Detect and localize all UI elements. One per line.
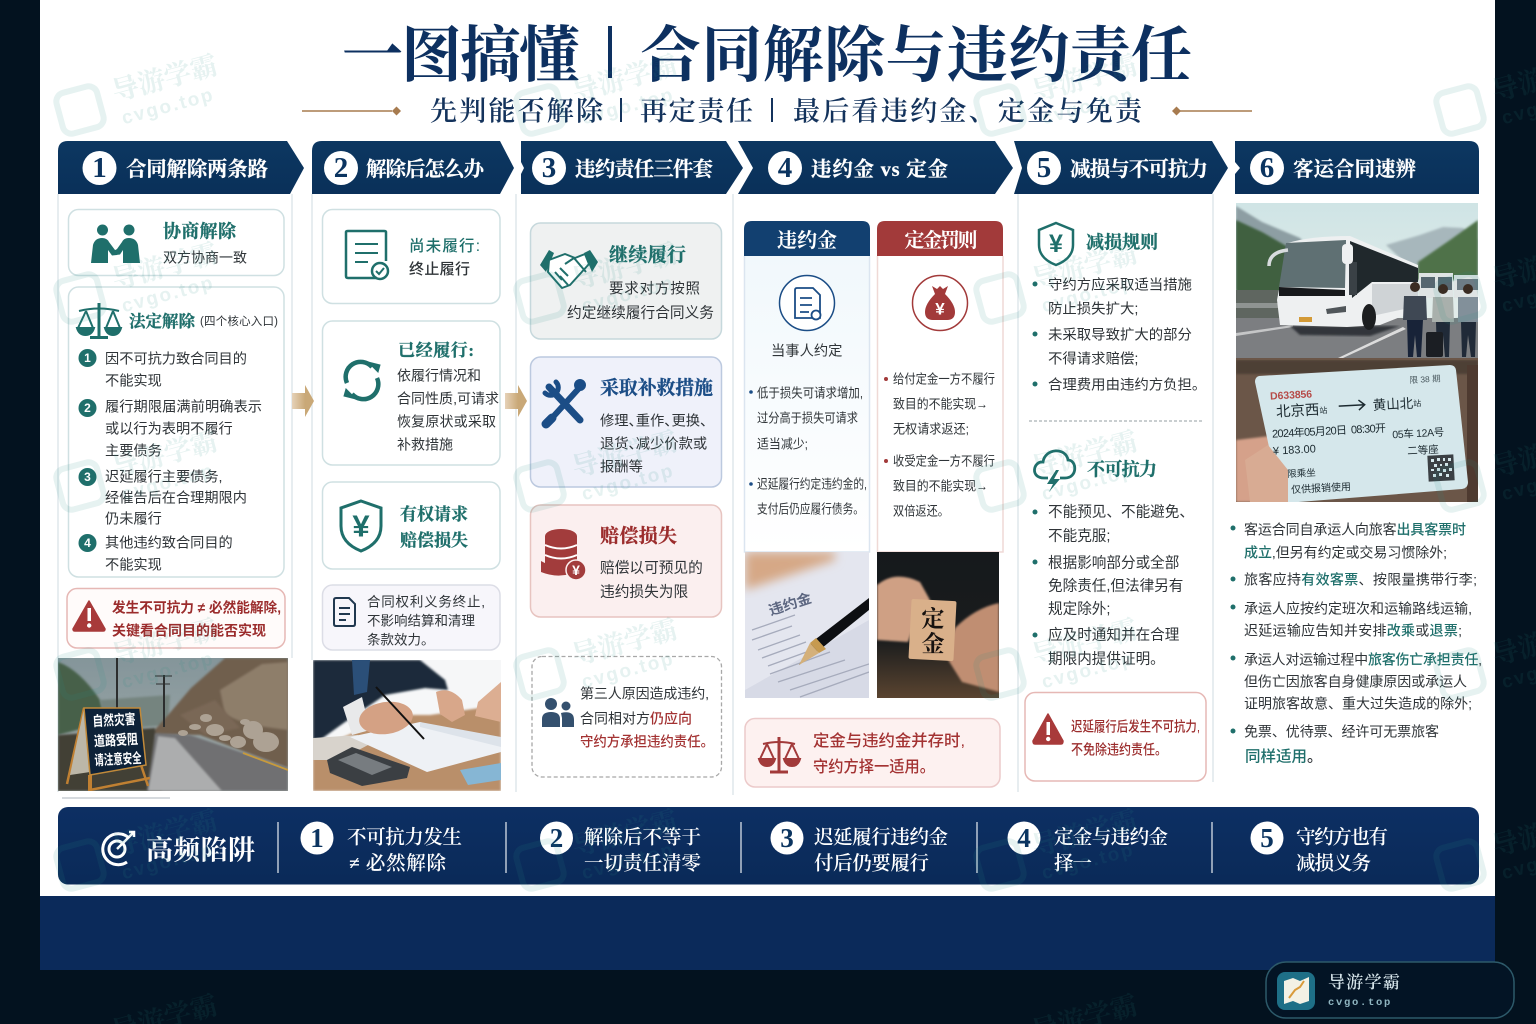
panel 2: 解除后怎么办 [312,141,514,791]
image: 车票: 黄山北站 [1372,395,1422,413]
card: 法定解除 [68,287,284,577]
watermark layer: 导游学霸 [1029,238,1141,295]
block: 减损规则: 防止损失扩大; [1048,300,1138,317]
trap 1: 1 [310,823,324,853]
watermark layer: 导游学霸 [109,614,221,671]
list: 客运规则: 免票、优待票、经许可无票旅客 [1244,723,1439,739]
watermark layer: 导游学霸 [109,50,221,107]
image: 定金木块 [877,552,999,698]
list: 客运规则: 迟延运输应告知并安排改乘或退票; [1244,622,1462,638]
icon: shield yen [1039,223,1073,265]
icon: document check [346,231,388,279]
list: 客运规则: 但伤亡因旅客自身健康原因或承运人 [1244,673,1467,689]
header 4 [738,141,1013,194]
header 1: 合同解除两条路 [126,158,268,181]
icon: warning [73,601,105,631]
trap 2: 2 [550,823,563,853]
watermark layer: 导游学霸 [109,238,221,295]
watermark layer: cvgo.top [119,648,217,693]
list: 四个入口: 仍未履行 [105,511,162,527]
list: 四个入口: 4 [84,536,91,550]
list: 四个入口: 迟延履行主要债务, [105,469,222,485]
icon: money bag: ¥ [935,300,945,318]
block: 不可抗力 [1032,451,1194,667]
trap 1: ≠ 必然解除 [349,852,447,874]
note: 择一适用: 定金与违约金并存时, [813,731,965,750]
card: 赔偿损失: 赔偿以可预见的 [600,559,703,576]
icon: handshake people [91,224,140,263]
header 4: 4 [778,152,792,184]
list: 客运规则: 同样适用。 [1245,747,1323,765]
trap 3: 付后仍要履行 [814,852,929,874]
card: 有权请求赔偿损失: 赔偿损失 [400,530,468,550]
card: 权利义务终止: 合同权利义务终止, [367,594,485,610]
block: 不可抗力: 应及时通知并在合理 [1048,625,1180,643]
watermark layer: cvgo.top [579,84,677,129]
icon: tools [545,380,584,424]
card: 已经履行: 恢复原状或采取 [397,413,496,429]
card: 赔偿损失: 违约损失为限 [600,583,688,600]
card: 继续履行: 约定继续履行合同义务 [567,304,714,321]
icon: handshake [540,250,598,288]
header 5: 减损与不可抗力 [1070,158,1208,181]
title: 一图搞懂 [342,22,580,90]
header 5 [1014,141,1228,194]
card: 尚未履行: 终止履行 [409,261,470,278]
icon: shield yen: ¥ [1049,230,1063,258]
column: 定金罚则: 致目的不能实现→ [893,479,988,494]
callout: 迟延不免责 [1025,692,1206,781]
list: 客运规则: 承运人应按约定班次和运输路线运输, [1244,600,1472,616]
list: 四个入口: 3 [84,470,91,484]
list: 四个入口: 因不可抗力致合同目的 [105,351,247,367]
image: 滑坡路段: 自然灾害 [92,711,136,729]
card: 赔偿损失 [530,505,722,617]
watermark layer: cvgo.top [1039,648,1137,693]
watermark layer: cvgo.top [579,272,677,317]
header 1: 1 [92,152,107,184]
list: 四个入口: 履行期限届满前明确表示 [105,398,262,415]
list: 四个入口: 主要债务 [105,443,162,459]
callout: 不可抗力提醒: 发生不可抗力 ≠ 必然能解除, [112,599,281,615]
image: 车票: 二等座 [1407,443,1439,457]
list: 四个入口: 1 [84,351,91,365]
icon: sync arrows [344,362,380,399]
trap 2 [540,822,701,874]
block: 不可抗力: 不能克服; [1048,527,1110,544]
column frames [58,194,1213,795]
card: 采取补救措施: 退货、减少价款或 [600,435,707,452]
list: 四个入口 [78,349,262,573]
image: 定金木块: 定 [922,607,944,632]
header 3: 3 [542,152,556,184]
block: 减损规则: 减损规则 [1086,233,1158,253]
trap 2: 解除后不等于 [584,826,701,848]
image: 滑坡路段 [58,658,288,791]
block: 不可抗力: 根据影响部分或全部 [1048,553,1179,571]
icon: target [103,832,134,865]
tab: 定金罚则 [877,221,1003,256]
list: 四个入口: 不能实现 [105,557,162,573]
note: 择一适用 [745,718,1000,787]
image: 客车与乘客 [1236,203,1478,360]
card: 法定解除: (四个核心入口) [200,314,278,328]
arrow: 1 to 2 [292,385,314,417]
column: 违约金: 迟延履行约定违约金的, [757,477,867,492]
trap 4: 定金与违约金 [1054,826,1168,848]
block: 减损规则 [1032,223,1206,393]
list: 客运规则: 旅客应持有效客票、按限量携带行李; [1244,571,1477,587]
block: 不可抗力: 不可抗力 [1087,459,1157,480]
column: 定金罚则: 无权请求返还; [893,422,969,437]
panel 3: 违约责任三件套 [521,141,743,777]
card: 第三人原因: 合同相对方仍应向 [580,710,692,726]
icon: agreement doc [780,276,834,330]
trap 2: 一切责任清零 [584,852,701,874]
card: 法定解除: 法定解除 [129,312,196,331]
watermark layer: 导游学霸 [1029,614,1141,671]
trap 4 [1008,822,1168,874]
header 6: 客运合同速辨 [1293,157,1416,181]
column: 定金罚则: 收受定金一方不履行 [893,454,995,469]
column: 定金罚则: 双倍返还。 [893,504,949,519]
icon: shield yen [341,501,381,551]
card: 协商解除 [68,210,284,276]
watermark layer: cvgo.top [119,839,217,884]
block: 减损规则: 守约方应采取适当措施 [1048,275,1192,293]
watermark layer: cvgo.top [579,839,677,884]
subtitle: 最后看违约金、定金与免责 [793,96,1145,126]
column: 违约金: 过分高于损失可请求 [757,411,858,426]
watermark layer: 导游学霸 [569,238,681,295]
watermark layer: 导游学霸 [569,614,681,671]
image: 滑坡路段: 道路受阻 [94,731,138,749]
card: 权利义务终止: 不影响结算和清理 [367,614,475,629]
tab: 违约金 [744,221,870,256]
image: 车票: 限 38 期 [1409,373,1441,385]
header 2 [312,141,514,194]
card: 第三人原因 [532,656,722,777]
header 6: 6 [1260,152,1274,184]
watermark layer: 导游学霸 [109,805,221,862]
image: 车票: D633856 [1270,388,1313,403]
watermark layer: 导游学霸 [569,805,681,862]
panel 6: 客运合同速辨 [1230,141,1482,765]
trap 1: 不可抗力发生 [347,826,462,848]
image: 滑坡路段: 请注意安全 [94,750,142,768]
watermark layer: cvgo.top [579,648,677,693]
card: 已经履行: 补救措施 [397,436,453,452]
panel 4: 违约金 vs 定金 [738,141,1013,787]
watermark layer: cvgo.top [579,460,677,505]
card: 采取补救措施: 采取补救措施 [600,377,713,399]
watermark layer: cvgo.top [1039,839,1137,884]
icon: map logo [1277,972,1315,1010]
column: 违约金: 支付后仍应履行债务。 [757,502,864,517]
watermark layer: 导游学霸 [1029,426,1141,483]
trap 5: 减损义务 [1296,852,1371,874]
arrow: 2 to 3 [505,385,527,417]
title: 合同解除与违约责任 [640,23,1192,90]
column: 违约金: 当事人约定 [771,342,842,359]
card: 继续履行: 继续履行 [609,244,686,266]
column: 定金罚则: 给付定金一方不履行 [893,372,995,387]
navy footer band [40,896,1495,970]
list: 四个入口: 不能实现 [105,373,162,389]
icon: storm cloud [1034,451,1075,492]
card: 已经履行 [322,321,500,465]
watermark layer: 导游学霸 [1029,805,1141,862]
brand badge: cvgo.top [1328,997,1392,1009]
card: 已经履行: 依履行情况和 [397,367,481,383]
subtitle: 先判能否解除 [430,96,605,126]
callout: 不可抗力提醒: 关键看合同目的能否实现 [112,622,266,638]
card: 已经履行: 合同性质,可请求 [397,390,499,406]
list: 客运规则: 证明旅客故意、重大过失造成的除外; [1244,695,1472,711]
trap 3: 3 [780,823,794,853]
block: 不可抗力: 不能预见、不能避免、 [1048,503,1194,520]
icon: coins [541,529,586,580]
brand badge: 导游学霸 [1328,973,1401,992]
list: 四个入口: 其他违约致合同目的 [105,535,233,551]
subtitle: 再定责任 [640,96,753,126]
callout: 不可抗力提醒 [67,588,285,648]
list: 四个入口: 经催告后在合理期限内 [105,490,247,506]
image: 车票: 2024年05月20日 08:30开 [1272,421,1386,441]
column: 定金罚则: 致目的不能实现→ [893,397,988,412]
trap 3 [770,822,948,874]
brand badge [1266,962,1514,1018]
card: 尚未履行: 尚未履行: [409,237,480,255]
icon: coins: ¥ [572,562,580,578]
panel 5: 减损与不可抗力 [1014,141,1228,781]
card: 第三人原因: 守约方承担违约责任。 [580,733,714,749]
image: 违约金合同与钢笔 [745,552,869,698]
header 6 [1235,141,1479,194]
list: 四个入口: 2 [84,401,91,415]
trap 5: 守约方也有 [1296,826,1388,848]
card: 继续履行 [530,223,722,339]
card: 协商解除: 协商解除 [163,222,238,242]
watermark layer: 导游学霸 [109,426,221,483]
icon: file [334,598,355,626]
header 4: 违约金 vs 定金 [811,158,948,181]
card: 采取补救措施: 修理、重作、更换、 [600,412,707,429]
watermark layer: cvgo.top [1039,272,1137,317]
image: 车票: ¥ 183.00 [1272,443,1316,458]
card: 采取补救措施: 报酬等 [600,457,643,475]
card: 继续履行: 要求对方按照 [609,280,700,297]
bottom bar: 高频陷阱 [58,807,1479,884]
icon: shield yen: ¥ [352,508,370,544]
callout: 迟延不免责: 迟延履行后发生不可抗力, [1071,718,1200,734]
block: 减损规则: 未采取导致扩大的部分 [1048,326,1192,343]
trap 4: 4 [1017,823,1031,853]
icon: QR code [1427,454,1455,482]
card: 赔偿损失: 赔偿损失 [600,525,677,547]
image: 签约场景 [313,660,501,791]
trap 5: 5 [1260,823,1274,853]
header 5: 5 [1037,152,1051,184]
image: 违约金合同与钢笔: 违约金 [767,590,813,618]
icon: scales [77,303,121,338]
list: 客运规则: 成立,但另有约定或交易习惯除外; [1244,544,1447,560]
list: 四个入口: 或以行为表明不履行 [105,421,233,437]
image: 定金木块: 金 [922,632,944,657]
header 2: 解除后怎么办 [366,158,486,181]
card: 第三人原因: 第三人原因造成违约, [580,685,709,701]
icon: money bag [912,276,968,330]
trap 5 [1250,822,1388,874]
column: 违约金 [744,221,870,698]
icon: people [542,698,574,727]
card: 已经履行: 已经履行: [398,341,474,360]
header 3 [521,141,743,194]
trap 4: 择一 [1054,852,1092,874]
block: 减损规则: 不得请求赔偿; [1048,350,1138,367]
list: 客运规则: 客运合同自承运人向旅客出具客票时 [1244,521,1466,537]
watermark layer: cvgo.top [1039,460,1137,505]
column: 违约金: 低于损失可请求增加, [757,386,863,401]
header 3: 违约责任三件套 [575,158,713,181]
icon: warning [1033,714,1063,744]
watermark layer: cvgo.top [119,272,217,317]
card: 尚未履行 [322,210,500,304]
header 2: 2 [334,152,348,184]
list: 客运规则 [1230,521,1482,765]
subtitle [302,96,1252,126]
trap 1 [300,822,462,874]
tab: 定金罚则: 定金罚则 [904,229,978,252]
column: 违约金: 适当减少; [757,437,808,452]
callout: 迟延不免责: 不免除违约责任。 [1071,741,1167,757]
block: 不可抗力: 期限内提供证明。 [1048,650,1165,667]
card: 权利义务终止 [322,585,500,650]
card: 有权请求赔偿损失 [322,482,500,569]
image: 车票: 限乘坐 [1287,467,1316,480]
watermark layer: 导游学霸 [1029,50,1141,107]
image: 车票: 05车 12A号 [1392,426,1445,441]
watermark layer: 导游学霸 [569,50,681,107]
title [342,22,1192,90]
block: 不可抗力: 规定除外; [1048,600,1110,617]
bottom bar: 高频陷阱: 高频陷阱 [146,834,255,865]
watermark layer: 导游学霸 [569,426,681,483]
image: 车票 [1236,360,1478,502]
panel 1: 合同解除两条路 [58,141,304,798]
note: 择一适用: 守约方择一适用。 [813,757,935,776]
block: 减损规则: 合理费用由违约方负担。 [1048,376,1206,393]
block: 不可抗力: 免除责任,但法律另有 [1048,577,1183,594]
watermark layer: cvgo.top [1039,84,1137,129]
column: 定金罚则 [877,221,1003,698]
card: 协商解除: 双方协商一致 [163,249,247,265]
image: 车票: 北京西站 [1276,401,1328,421]
card: 权利义务终止: 条款效力。 [367,632,434,648]
icon: scales red [759,737,800,772]
tab: 违约金: 违约金 [777,229,837,252]
trap 3: 迟延履行违约金 [814,826,948,848]
card: 有权请求赔偿损失: 有权请求 [400,504,468,524]
image: 车票: 仅供报销使用 [1291,480,1351,496]
card: 采取补救措施 [530,357,722,487]
watermark layer: cvgo.top [119,84,217,129]
header 1 [58,141,304,194]
list: 客运规则: 承运人对运输过程中旅客伤亡承担责任, [1244,651,1482,667]
watermark layer: cvgo.top [119,460,217,505]
